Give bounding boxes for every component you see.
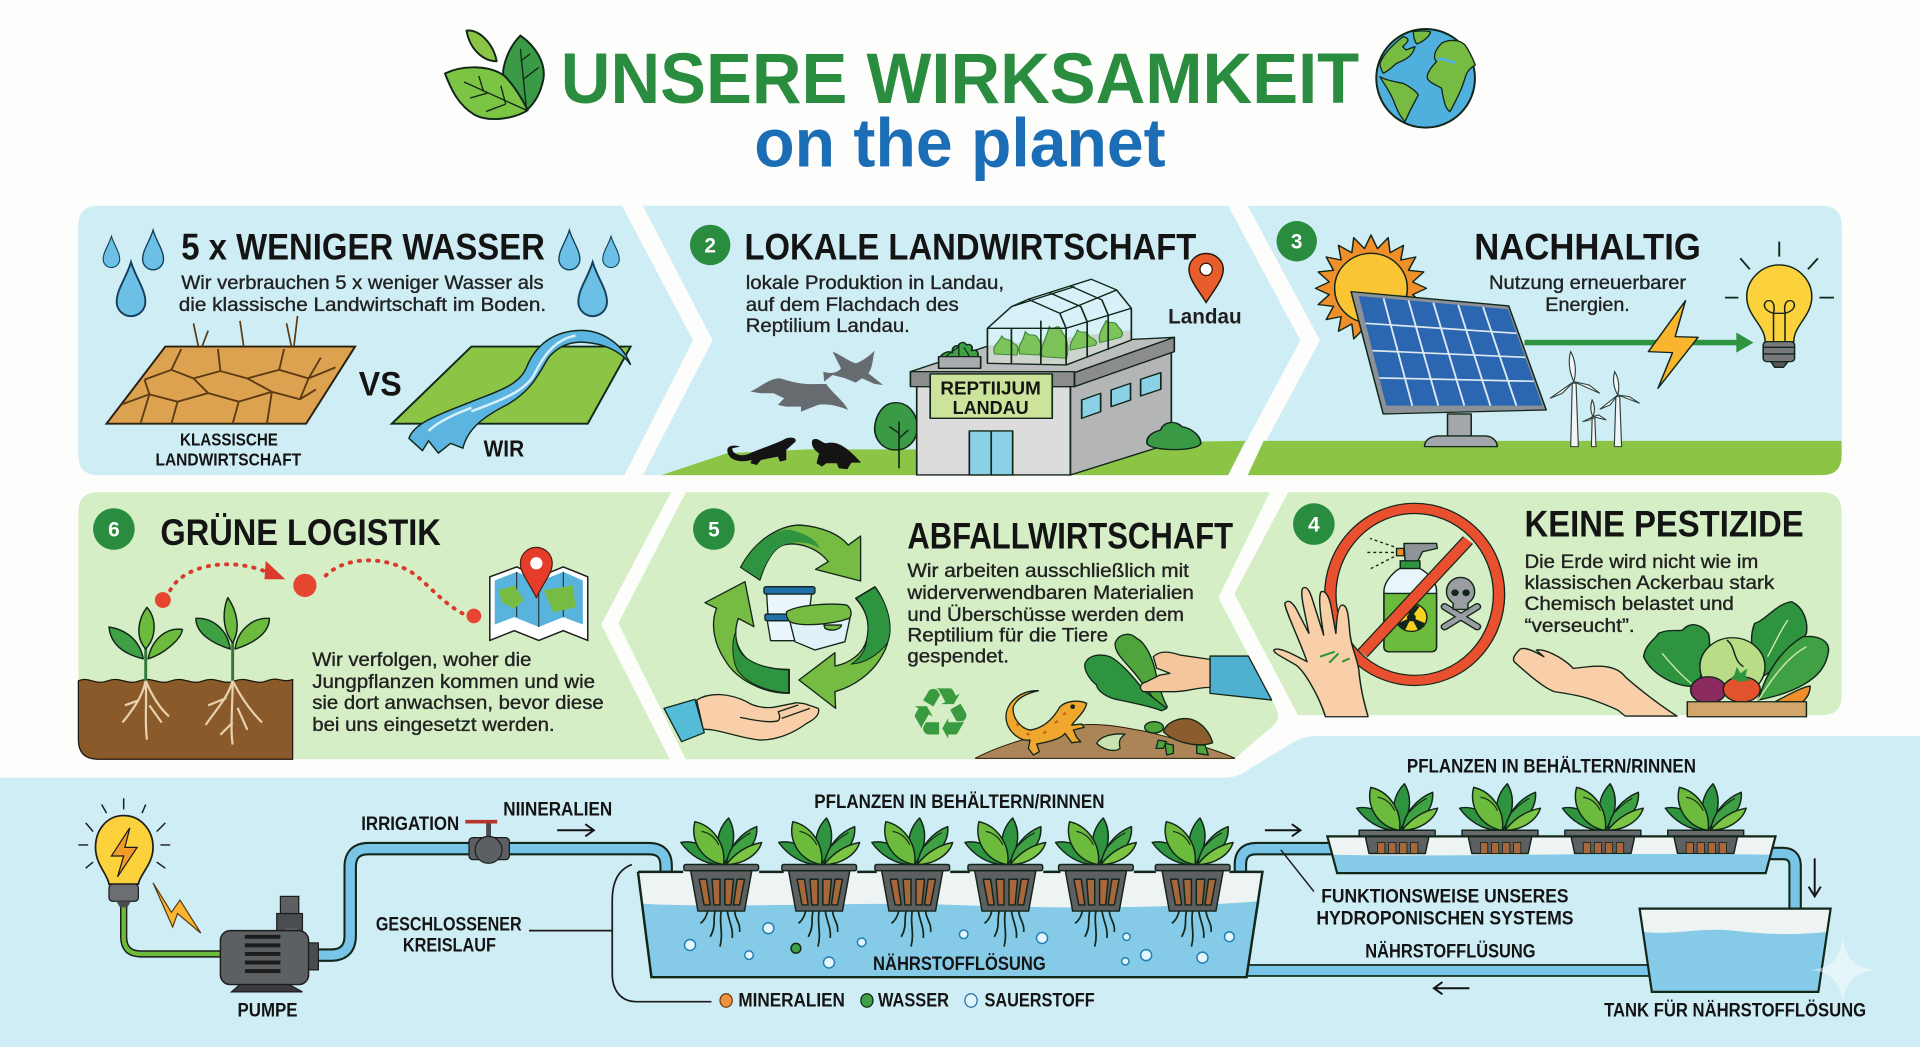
icon: seedling left xyxy=(109,607,182,740)
icon: black lizard xyxy=(727,438,796,465)
icon: map with pin xyxy=(490,547,588,640)
icon: small lightning xyxy=(153,883,201,933)
icon: recycle symbol: ♻ xyxy=(909,672,972,755)
text block: die klassische Landwirtschaft im Boden. xyxy=(179,294,546,316)
tray outline xyxy=(638,872,1262,977)
text block: gespendet. xyxy=(907,645,1009,667)
heading: 5 x WENIGER WASSER xyxy=(181,227,545,268)
badge 3 xyxy=(1277,221,1317,261)
building sign text xyxy=(940,377,1041,418)
icon: green field with river xyxy=(392,330,631,453)
text block: Wir verfolgen, woher die xyxy=(312,649,532,671)
icon: open hand xyxy=(1513,648,1677,716)
icon: potted plant xyxy=(939,342,981,368)
soil xyxy=(78,679,293,759)
icon: prohibition sign xyxy=(1330,508,1499,680)
icon: reusable containers xyxy=(764,587,851,650)
icons: reptile silhouettes xyxy=(750,351,883,412)
pipe: pump to tank xyxy=(316,849,673,955)
pipe: upper tray to nutrient tank xyxy=(1769,854,1795,912)
text block: Reptilium für die Tiere xyxy=(907,625,1108,647)
text block: widerverwendbaren Materialien xyxy=(906,582,1194,604)
icon: turtle xyxy=(1145,719,1213,755)
text block: Chemisch belastet und xyxy=(1524,593,1734,615)
icon: water drops right xyxy=(559,230,619,316)
label: Funktionsweise: FUNKTIONSWEISE UNSERES xyxy=(1321,886,1569,908)
text block xyxy=(1524,551,1774,637)
icon: tree xyxy=(875,403,918,468)
label: Nährstofflösung tray: NÄHRSTOFFLÖSUNG xyxy=(873,952,1046,975)
label: Pflanzen upper tray: PFLANZEN IN BEHÄLTERN/RINNEN xyxy=(1407,755,1696,778)
text block: Reptilium Landau. xyxy=(746,315,910,337)
arrow: green energy xyxy=(1524,332,1753,353)
icon: valve xyxy=(465,822,509,863)
panel: Abfallwirtschaft xyxy=(618,492,1278,759)
legend: MINERALIEN xyxy=(738,990,845,1012)
icon: black turtle xyxy=(812,439,861,469)
label: Funktionsweise: HYDROPONISCHEN SYSTEMS xyxy=(1316,908,1573,930)
icon: vegetables xyxy=(1644,602,1829,717)
label: Funktionsweise xyxy=(1316,886,1573,930)
bracket line xyxy=(529,865,711,1002)
label: klassische Landwirtschaft: LANDWIRTSCHAFT xyxy=(156,449,302,469)
text block xyxy=(312,649,604,736)
icon: dotted route xyxy=(155,560,481,623)
icon: hand with leaves xyxy=(1085,634,1272,711)
label: wir: WIR xyxy=(484,436,524,462)
icon: skull and crossbones xyxy=(1445,577,1477,627)
badge 6: 6 xyxy=(108,518,120,541)
label: closed loop: KREISLAUF xyxy=(403,934,496,956)
text block: Wir arbeiten ausschließlich mit xyxy=(907,560,1190,582)
badge 4 xyxy=(1293,503,1335,545)
text block: “verseucht”. xyxy=(1524,615,1635,637)
heading: NACHHALTIG xyxy=(1474,227,1701,268)
icon: hand giving xyxy=(664,695,819,742)
panel: keine Pestizide xyxy=(1234,492,1842,717)
pipe: tank to upper tray xyxy=(1240,849,1335,872)
ground xyxy=(661,441,1245,475)
arrow: flow down xyxy=(1809,858,1821,896)
nutrient tank xyxy=(1640,909,1831,992)
leader line xyxy=(1281,850,1314,891)
text block: klassischen Ackerbau stark xyxy=(1524,572,1774,594)
panel: lokale Landwirtschaft xyxy=(643,206,1300,475)
label: Tank: TANK FÜR NÄHRSTOFFLÖSUNG xyxy=(1604,998,1866,1021)
label: klassische Landwirtschaft xyxy=(156,430,302,469)
label: closed loop: GESCHLOSSENER xyxy=(376,914,522,936)
label: Pumpe: PUMPE xyxy=(238,999,298,1021)
upper tray xyxy=(1327,784,1776,873)
arrow: flow right upper xyxy=(1265,824,1300,836)
heading: KEINE PESTIZIDE xyxy=(1524,503,1804,544)
text block xyxy=(179,272,546,316)
heading: GRÜNE LOGISTIK xyxy=(160,512,441,553)
badge 2 xyxy=(690,225,730,265)
text block xyxy=(1489,272,1687,316)
icon: globe xyxy=(1376,29,1475,128)
text block xyxy=(906,560,1194,667)
text block: Nutzung erneuerbarer xyxy=(1489,272,1687,294)
text block: auf dem Flachdach des xyxy=(746,294,959,316)
legend: SAUERSTOFF xyxy=(984,990,1095,1012)
label: VS: VS xyxy=(359,366,402,404)
badge 5 xyxy=(693,508,735,550)
building sign text: LANDAU xyxy=(953,397,1029,418)
icon: dry soil xyxy=(107,316,355,424)
icon: pump xyxy=(220,896,318,992)
icon: wind turbines xyxy=(1550,352,1640,447)
label: closed loop xyxy=(376,914,522,956)
ground xyxy=(1248,441,1842,475)
icon: gecko xyxy=(1006,691,1087,755)
icon: scrap xyxy=(1097,734,1125,750)
icon: building Reptilium xyxy=(910,337,1174,475)
text block: sie dort anwachsen, bevor diese xyxy=(312,692,604,714)
icon: lightning xyxy=(1648,301,1698,388)
label: Nineralien: NIINERALIEN xyxy=(503,799,612,821)
main tray xyxy=(638,872,1262,977)
text block: bei uns eingesetzt werden. xyxy=(312,714,555,736)
label: Pflanzen main tray: PFLANZEN IN BEHÄLTERN/RINNEN xyxy=(814,790,1104,813)
heading: UNSERE WIRKSAMKEIT xyxy=(561,40,1359,119)
label: klassische Landwirtschaft: KLASSISCHE xyxy=(180,430,278,450)
icon: bush xyxy=(1147,423,1201,450)
icon: location pin xyxy=(1189,253,1223,302)
heading: LOKALE LANDWIRTSCHAFT xyxy=(744,227,1197,268)
label: irrigation: IRRIGATION xyxy=(361,813,459,835)
panel: grüne Logistik xyxy=(78,492,671,759)
legend xyxy=(720,990,1095,1012)
text block: Jungpflanzen kommen und wie xyxy=(312,671,595,693)
icon: light bulb with bolt xyxy=(78,798,223,954)
icon: water drops left xyxy=(103,230,164,316)
text block: lokale Produktion in Landau, xyxy=(746,272,1004,294)
return pipe xyxy=(1243,965,1649,976)
icon: seedling right xyxy=(196,598,269,745)
label: Landau: Landau xyxy=(1168,305,1242,328)
text block: Energien. xyxy=(1545,294,1630,316)
icon: raised hand xyxy=(1274,588,1368,717)
subheading: on the planet xyxy=(754,105,1166,182)
heading: ABFALLWIRTSCHAFT xyxy=(907,516,1234,557)
bubbles xyxy=(684,923,1234,968)
panel: nachhaltig xyxy=(1248,206,1842,475)
badge 2: 2 xyxy=(704,234,716,257)
icon: solar panel xyxy=(1351,292,1546,447)
icon: light bulb xyxy=(1725,242,1834,367)
building sign text: REPTIIJUM xyxy=(940,377,1041,398)
title block xyxy=(445,29,1475,182)
text block: Die Erde wird nicht wie im xyxy=(1524,551,1758,573)
badge 5: 5 xyxy=(708,518,720,541)
text block: und Überschüsse werden dem xyxy=(907,604,1184,626)
icon: spray bottle xyxy=(1366,538,1437,652)
legend: WASSER xyxy=(878,990,949,1012)
panel: 5x weniger Wasser xyxy=(78,206,693,475)
badge 3: 3 xyxy=(1291,231,1303,254)
panel: hydroponic system xyxy=(0,736,1920,1047)
icon: recycling arrows xyxy=(705,525,890,708)
icon: leaves xyxy=(445,31,544,119)
label: Nährstofflüsung: NÄHRSTOFFLÜSUNG xyxy=(1365,940,1536,963)
icon: mound xyxy=(975,724,1235,758)
arrow: flow left xyxy=(1434,982,1469,994)
plants main tray xyxy=(681,818,1233,947)
badge 6 xyxy=(93,508,135,550)
text block: Wir verbrauchen 5 x weniger Wasser als xyxy=(181,272,544,294)
text block xyxy=(746,272,1004,337)
icon: greenhouse xyxy=(987,279,1131,365)
icon: sun xyxy=(1315,235,1426,342)
arrow: flow right xyxy=(557,824,594,836)
badge 4: 4 xyxy=(1308,513,1320,536)
watermark sparkle xyxy=(1811,938,1876,1002)
